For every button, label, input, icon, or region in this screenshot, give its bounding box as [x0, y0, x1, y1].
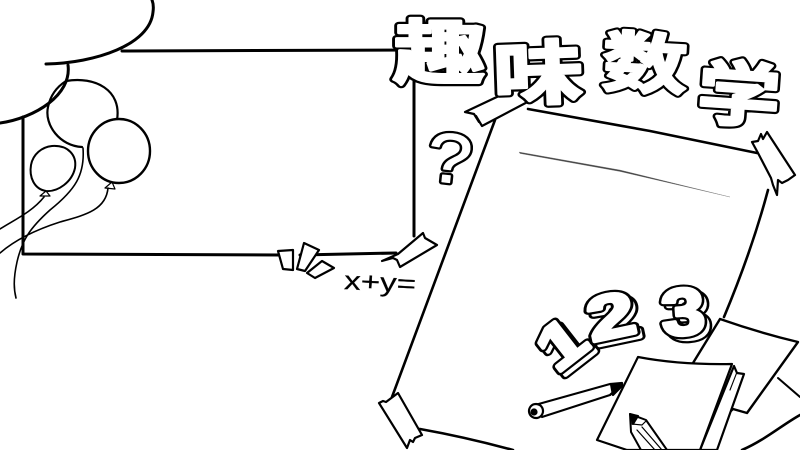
mark 2: [297, 243, 319, 271]
numeral 2 depth: 2: [585, 281, 646, 359]
mark 3: [307, 261, 334, 278]
balloon: right: [88, 119, 150, 183]
character 数 outline: 数: [600, 26, 689, 104]
pencil: [630, 414, 667, 450]
burst marks: [278, 243, 334, 278]
notebook: [597, 357, 744, 450]
tape: bottom left: [379, 393, 422, 448]
balloon knots: [40, 182, 115, 196]
question outline: ?: [423, 117, 476, 199]
balloon: large top: [47, 80, 118, 147]
paper highlight line: [519, 152, 730, 197]
numeral 3 face: 3: [659, 275, 707, 351]
paper edges: [392, 109, 800, 450]
notebook page lines: [727, 368, 737, 390]
character 学 outline: 学: [695, 55, 783, 138]
character 味 fill: 味: [492, 34, 584, 116]
numeral 2 face: 2: [580, 277, 641, 355]
character 趣 outline: 趣: [393, 16, 485, 93]
numeral 1 face: 1: [523, 303, 601, 385]
numeral 3 depth: 3: [664, 279, 712, 355]
numeral 1 face fill: 1: [523, 303, 601, 385]
numeral 3 depth fill: 3: [664, 279, 712, 355]
numeral 1 depth: 1: [528, 307, 606, 389]
frame: left photo box: [23, 50, 415, 255]
balloon strings: [0, 148, 108, 298]
cloud corner: [0, 0, 153, 123]
balloons: [0, 80, 150, 298]
question fill: ?: [423, 117, 476, 199]
back sheet: [660, 319, 798, 440]
character 味 outline: 味: [492, 34, 584, 116]
numerals 123: [523, 275, 712, 389]
question mark: [423, 117, 476, 199]
numeral 2 depth fill: 2: [585, 281, 646, 359]
title: 趣味数学: [393, 16, 783, 138]
character 数 fill: 数: [600, 26, 689, 104]
tape: middle: [382, 233, 437, 267]
marker pen: [527, 383, 622, 420]
mark 1: [278, 250, 293, 270]
formula: x+y=: [343, 265, 417, 299]
tape: top right: [752, 132, 795, 195]
numeral 2 face fill: 2: [580, 277, 641, 355]
numeral 3 face fill: 3: [659, 275, 707, 351]
character 趣 fill: 趣: [393, 16, 485, 93]
tape: top left: [465, 87, 537, 126]
numeral 1 depth fill: 1: [528, 307, 606, 389]
character 学 fill: 学: [695, 55, 783, 138]
balloon: small left: [31, 146, 75, 191]
